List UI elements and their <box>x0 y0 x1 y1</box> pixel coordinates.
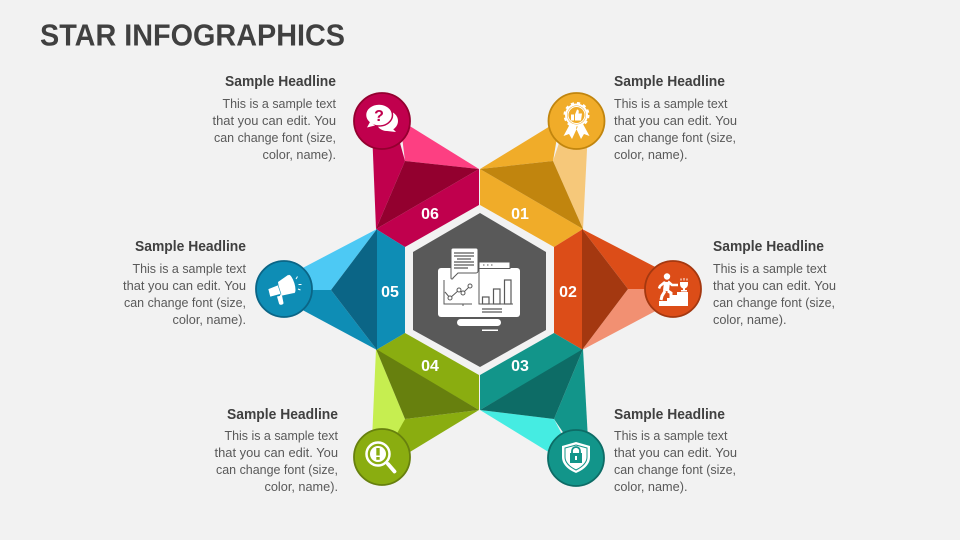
number 03: 03 <box>511 358 529 375</box>
body 02: color, name). <box>713 312 786 327</box>
star point 01: amber <box>480 120 588 247</box>
number 04: 04 <box>421 358 439 375</box>
body 01: color, name). <box>614 147 688 162</box>
body 04 <box>214 428 338 494</box>
star point 02: orange <box>554 229 670 350</box>
title: STAR INFOGRAPHICS <box>40 18 345 52</box>
body 01: that you can edit. You <box>614 113 737 128</box>
text block 03 <box>614 407 737 494</box>
body 03: can change font (size, <box>614 462 736 477</box>
body 02: that you can edit. You <box>713 278 836 293</box>
headline 05: Sample Headline <box>135 239 246 255</box>
body 04: This is a sample text <box>224 428 338 443</box>
number 05: 05 <box>381 284 399 301</box>
headline 03: Sample Headline <box>614 407 725 423</box>
icon: megaphone <box>256 261 312 317</box>
body 05: This is a sample text <box>132 261 246 276</box>
text block 06 <box>212 74 336 162</box>
headline 04: Sample Headline <box>227 407 338 423</box>
headline 02: Sample Headline <box>713 239 824 255</box>
number 02: 02 <box>559 284 577 301</box>
icon: question speech bubbles <box>354 93 410 149</box>
star point 05: blue <box>290 229 405 350</box>
body 02: can change font (size, <box>713 295 835 310</box>
body 03: that you can edit. You <box>614 445 737 460</box>
center hexagon with monitor icon <box>413 213 546 367</box>
body 06: This is a sample text <box>222 96 336 111</box>
body 05: can change font (size, <box>124 295 246 310</box>
body 06: can change font (size, <box>214 130 336 145</box>
star point 04: green <box>372 333 479 458</box>
body 01: This is a sample text <box>614 96 728 111</box>
body 04: color, name). <box>264 479 338 494</box>
text block 01 <box>614 74 737 162</box>
body 04: can change font (size, <box>216 462 338 477</box>
text block 05 <box>123 239 246 327</box>
icon: person climbing stairs to trophy <box>645 261 701 317</box>
headline 06: Sample Headline <box>225 74 336 90</box>
body 04: that you can edit. You <box>214 445 338 460</box>
text block 04 <box>214 407 338 494</box>
body 06: color, name). <box>262 147 336 162</box>
body 03 <box>614 428 737 494</box>
headline 01: Sample Headline <box>614 74 725 90</box>
body 02 <box>713 261 836 327</box>
body 05: that you can edit. You <box>123 278 246 293</box>
body 06 <box>212 96 336 162</box>
icon: shield with padlock <box>548 430 604 486</box>
icon: monitor with charts <box>438 248 520 331</box>
text block 02 <box>713 239 836 327</box>
body 05: color, name). <box>172 312 246 327</box>
body 01: can change font (size, <box>614 130 736 145</box>
star point 06: crimson <box>372 120 479 247</box>
icon: question speech bubbles: ? <box>374 108 384 125</box>
body 06: that you can edit. You <box>212 113 336 128</box>
body 01 <box>614 96 737 162</box>
icon: magnifier with exclamation <box>354 429 410 485</box>
star point 03: teal <box>480 333 588 456</box>
body 03: color, name). <box>614 479 688 494</box>
number 06: 06 <box>421 206 439 223</box>
body 03: This is a sample text <box>614 428 728 443</box>
body 05 <box>123 261 246 327</box>
icon: award ribbon with thumb up <box>548 93 604 149</box>
body 02: This is a sample text <box>713 261 827 276</box>
number 01: 01 <box>511 206 529 223</box>
